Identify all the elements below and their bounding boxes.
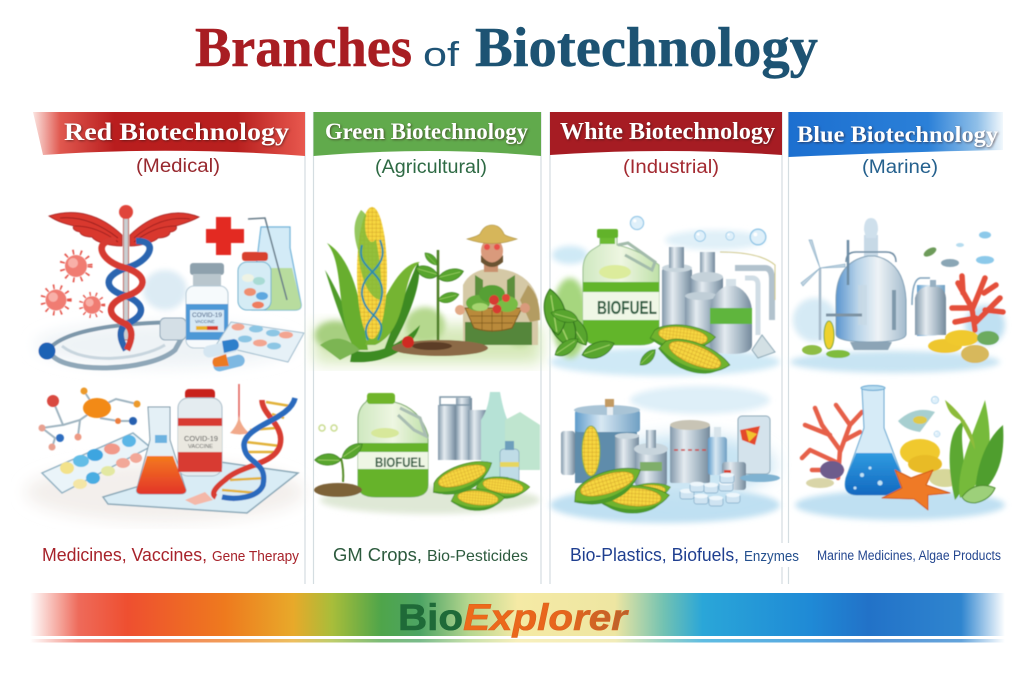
title: Biotechnology <box>475 17 818 79</box>
icon: tanks <box>662 247 723 350</box>
icon: small corn and stones <box>802 321 850 358</box>
icon: red flask <box>137 407 186 494</box>
icon: orange coral <box>802 405 862 488</box>
illustration: fermenters, corn and tablets <box>550 386 780 523</box>
icon: viruses <box>43 252 103 316</box>
icon: biofuel jug: BIOFUEL <box>375 454 425 470</box>
icon: corn <box>569 426 672 515</box>
icon: pill blister <box>42 433 150 493</box>
white subtitle: (Industrial) <box>623 157 719 178</box>
icon: corn <box>649 321 733 385</box>
icon: fish and bubbles <box>922 232 994 267</box>
icon: starfish <box>882 470 950 510</box>
white applications text: Enzymes <box>744 548 799 565</box>
red heading: Red Biotechnology <box>64 119 290 146</box>
icon: soil and tomato <box>320 336 488 360</box>
illustration: bioreactor and coral <box>790 218 1005 373</box>
icon: farmer <box>463 225 540 345</box>
icon: tanks <box>438 397 486 460</box>
illustration: biofuel jug and corn <box>314 392 540 514</box>
icon: blue flask <box>845 386 903 495</box>
icon: biofuel jug: BIOFUEL <box>597 298 657 318</box>
panel: blue biotechnology <box>788 112 1005 563</box>
white banner <box>550 112 782 155</box>
icon: capsules <box>202 339 246 373</box>
icon: caduceus <box>49 205 199 350</box>
icon: sapling <box>416 250 464 340</box>
icon: wind turbine <box>801 240 845 340</box>
icon: corn cobs <box>428 456 531 513</box>
icon: yellow coral <box>928 330 999 363</box>
illustration: biofuel jug and tanks <box>542 216 780 385</box>
icon: vaccine vial <box>186 263 228 348</box>
illustration: pills, flask, vial and DNA <box>25 384 305 522</box>
icon: algae and bubbles <box>898 396 940 437</box>
green subtitle: (Agricultural) <box>375 157 487 178</box>
title: Branches <box>195 17 412 79</box>
icon: seedling <box>314 442 366 497</box>
icon: vaccine vial: VACCINE <box>195 319 215 324</box>
icon: vegetable basket <box>455 285 530 332</box>
title: of <box>423 36 460 74</box>
blue applications text: Marine Medicines, Algae Products <box>817 548 1001 563</box>
red banner <box>33 112 305 156</box>
white applications text: Bio-Plastics, Biofuels, <box>570 545 739 565</box>
icon: stethoscope <box>38 318 190 368</box>
icon: green tank <box>710 279 752 354</box>
icon: molecule <box>38 388 140 450</box>
icon: seaweed <box>945 400 1003 503</box>
red applications text <box>42 545 300 565</box>
green heading: Green Biotechnology <box>325 119 528 144</box>
panel: green biotechnology <box>314 112 541 565</box>
icon: vaccine vial: COVID-19 <box>192 313 223 319</box>
title <box>195 17 818 79</box>
icon: corn with DNA <box>325 207 420 362</box>
white heading: White Biotechnology <box>560 119 775 145</box>
footer band <box>30 593 1005 642</box>
green banner <box>314 112 541 156</box>
red applications text: Gene Therapy <box>212 549 300 565</box>
icon: red coral <box>952 276 1003 330</box>
green applications text <box>333 545 528 565</box>
illustration: corn and farmer <box>315 207 541 363</box>
panel: white biotechnology <box>542 112 799 565</box>
red applications text: Medicines, Vaccines, <box>42 545 207 565</box>
icon: water bubbles <box>630 216 766 245</box>
icon: red cross <box>206 217 244 255</box>
icon: DNA helix <box>214 398 295 498</box>
panel: red biotechnology <box>25 112 305 565</box>
illustration: medical tools and caduceus <box>35 205 304 373</box>
green applications text: Bio-Pesticides <box>427 548 528 565</box>
icon: vaccine bottle: COVID-19 <box>184 436 218 443</box>
icon: pill jar <box>238 252 271 310</box>
icon: tablets <box>680 473 740 506</box>
icon: pipes <box>720 252 775 335</box>
icon: plastic bottles <box>481 392 540 490</box>
BioExplorer logo: BioExplorer <box>398 597 630 638</box>
blue banner <box>788 112 1003 157</box>
blue heading: Blue Biotechnology <box>797 122 999 147</box>
icon: tanks <box>561 399 640 483</box>
icon: tray <box>103 462 298 513</box>
icon: biofuel jug <box>583 229 659 345</box>
red subtitle: (Medical) <box>136 156 220 177</box>
icon: green leaves <box>542 289 660 367</box>
icon: yellow coral <box>900 439 961 487</box>
icon: bioreactor <box>826 218 906 350</box>
blue subtitle: (Marine) <box>862 157 938 178</box>
icon: vaccine bottle <box>178 389 222 476</box>
green applications text: GM Crops, <box>333 545 422 565</box>
icon: beaker <box>248 218 301 310</box>
icon: side tanks <box>912 278 946 336</box>
icon: blister pack <box>216 322 304 362</box>
icon: vaccine bottle: VACCINE <box>188 444 213 450</box>
illustration: flask, coral, starfish and seaweed <box>795 386 1005 520</box>
icon: biofuel jug <box>358 393 428 497</box>
